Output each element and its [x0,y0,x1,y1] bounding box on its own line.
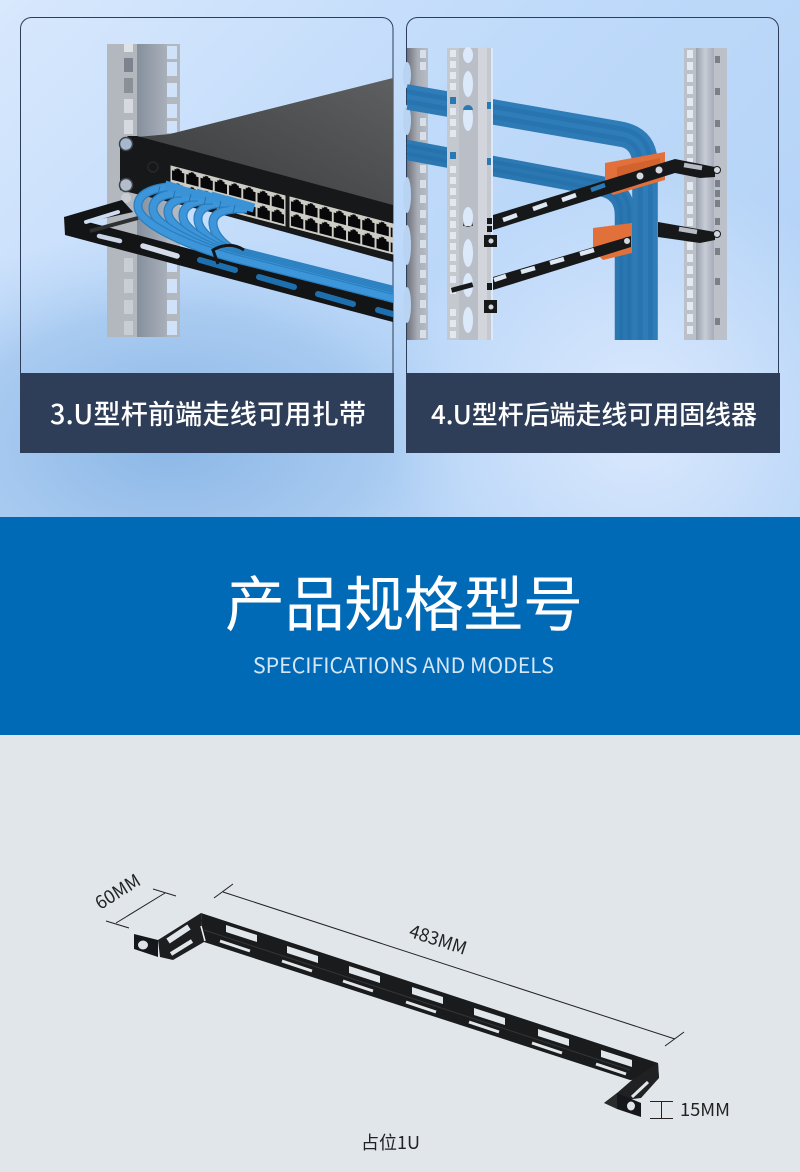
right end tab and arm [604,1063,659,1117]
switch top face [137,78,393,208]
rear bracket screws [488,166,720,310]
power mark [148,162,158,172]
caption: left panel: 3.U型杆前端走线可用扎带 [50,393,366,432]
ethernet ports [171,166,393,254]
page background: blue gradient [0,0,800,517]
far-left rack post [403,48,428,340]
subheading: SPECIFICATIONS AND MODELS [253,650,554,680]
lower slots [220,941,626,1074]
rack screws [120,138,132,203]
dimension: 15MM [650,1096,730,1122]
section banner [0,517,800,735]
panel outline [406,18,778,388]
heading: 产品规格型号 [225,557,583,644]
label: rack units: 占位1U [361,1129,420,1155]
left rack post [447,47,493,340]
lower cable bundle [407,142,633,340]
rear bracket arms [451,159,715,313]
bracket slots [494,165,702,280]
dimension: 483MM [214,884,684,1046]
dimension: 15MM: 15MM [680,1096,730,1122]
left end tab and arm [134,913,204,960]
dimension: 60MM [90,867,176,928]
U bracket [64,200,396,322]
caption: right panel: 4.U型杆后端走线可用固线器 [431,395,757,432]
switch front face [120,136,393,262]
long bar [201,913,659,1080]
dimension: 483MM: 483MM [406,918,470,961]
caption: left panel [20,373,394,453]
network cables [138,185,396,299]
right rack post [684,48,727,340]
dimension: 60MM: 60MM [90,867,145,915]
panel: rear cable routing [403,18,778,388]
cable tie [213,245,244,264]
upper slots [226,925,632,1067]
orange cable clips [593,152,665,260]
product drawing: U bracket [134,913,659,1117]
upper cable bundle [407,87,655,340]
panel: front cable routing [20,18,396,388]
rack post [107,44,180,337]
panel outline [20,18,393,388]
caption: right panel [406,373,780,453]
spec section background [0,735,800,1172]
